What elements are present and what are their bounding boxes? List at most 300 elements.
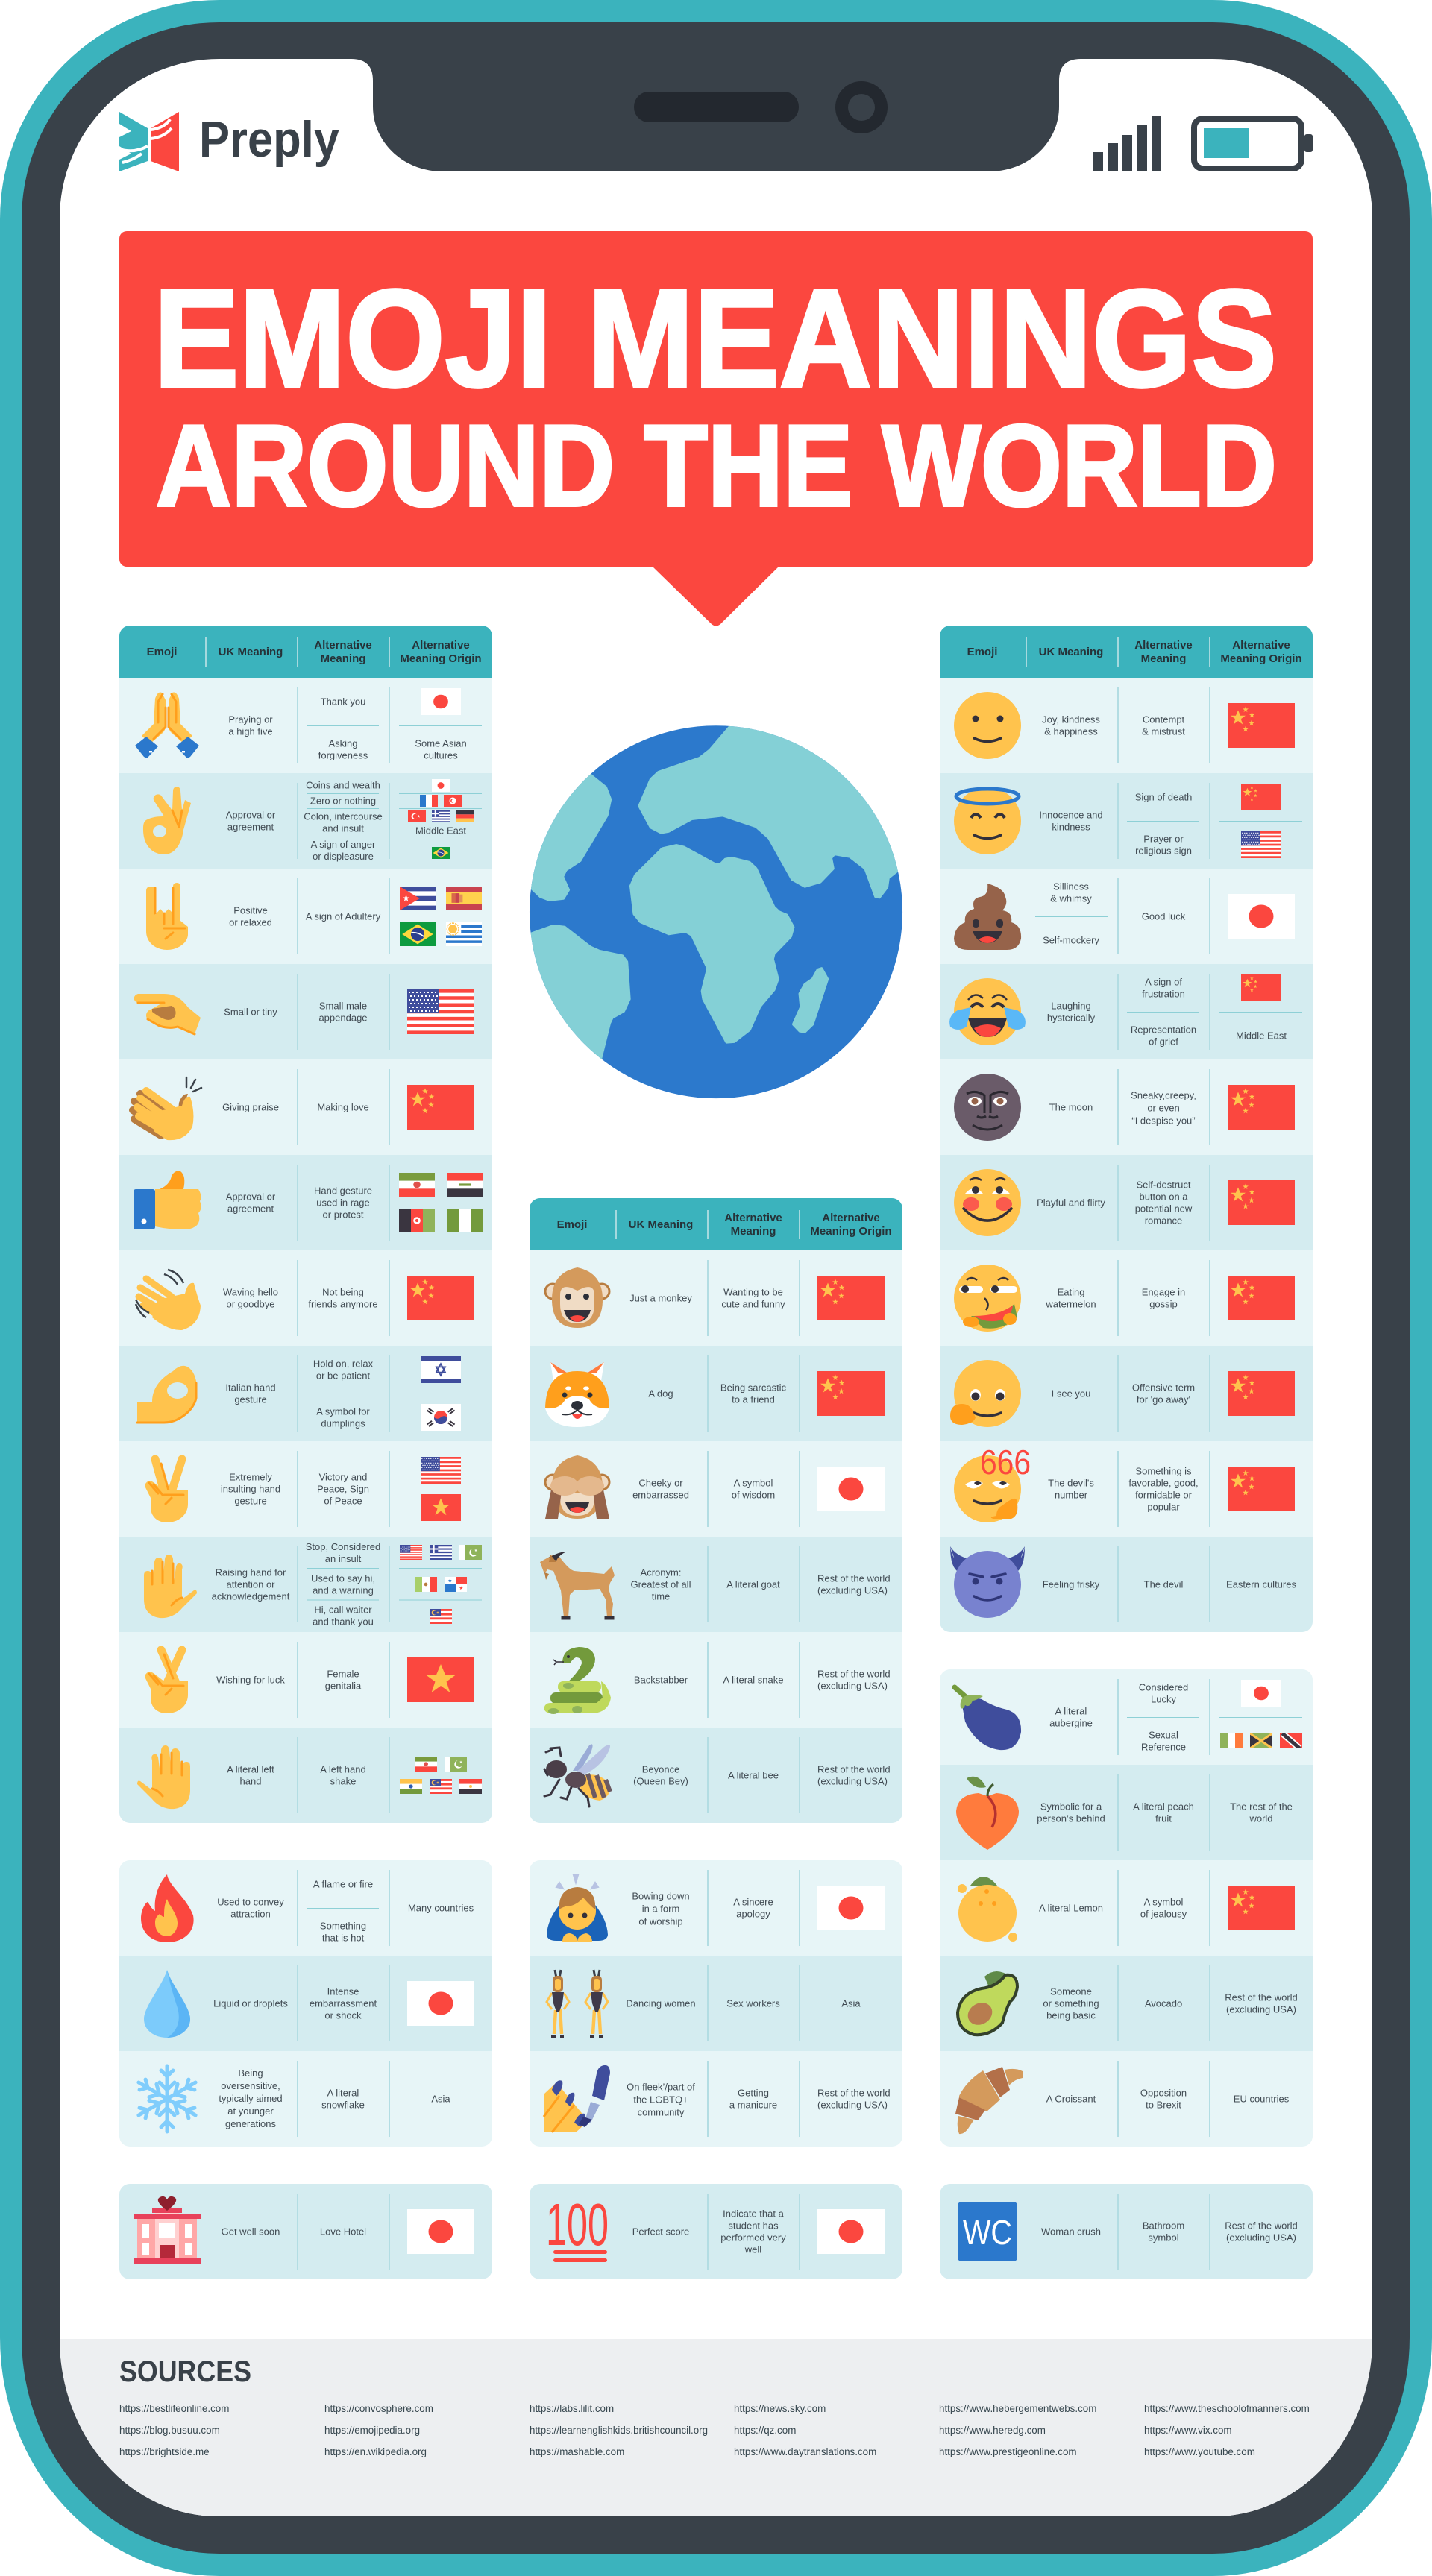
text: UK meaning: the LGBTQ+: [633, 2094, 688, 2106]
text: alternative meanings: that is hot: [322, 1933, 365, 1943]
text: UK meaning: Beyonce: [642, 1764, 679, 1774]
text: UK meaning: oversensitive,: [221, 2080, 280, 2091]
text: alternative meaning: Small male: [319, 1001, 367, 1011]
text: origin: world: [1249, 1813, 1273, 1824]
row: avocado: [940, 1956, 1313, 2051]
text: UK meaning: kindness: [1052, 822, 1090, 832]
text: alternative meaning: A left hand: [320, 1764, 366, 1774]
text: alternative meaning: romance: [1145, 1215, 1182, 1226]
text: alternative meanings: Stop, Considered: [306, 1541, 380, 1552]
origin flag: [817, 1886, 885, 1930]
icon: left raised hand: [137, 1745, 190, 1809]
row: victory hand: [119, 1441, 492, 1537]
icon: fire: [141, 1874, 194, 1942]
source links: https://convosphere.com: [324, 2403, 433, 2414]
text: UK meaning: gesture: [234, 1394, 267, 1405]
origin flag: [817, 1276, 885, 1320]
text: UK meaning: Raising hand for: [216, 1567, 286, 1578]
origin flag: [407, 1085, 474, 1130]
row: bee: [530, 1728, 902, 1823]
origin flag: [407, 1276, 474, 1320]
text: alternative meaning: embarrassment: [310, 1998, 377, 2009]
panel: middle table: [530, 1198, 902, 1823]
source links: https://www.vix.com: [1144, 2425, 1232, 2436]
text: alternative meanings: frustration: [1142, 989, 1185, 999]
icon: signal bars: [1093, 116, 1161, 171]
text: UK meaning: Backstabber: [634, 1675, 688, 1685]
text: UK meaning: Symbolic for a: [1040, 1801, 1102, 1812]
text: UK meaning: Cheeky or: [638, 1478, 683, 1488]
row: watermelon: [940, 1250, 1313, 1346]
source links: https://labs.lilit.com: [530, 2403, 614, 2414]
text: UK meaning: watermelon: [1045, 1299, 1096, 1309]
text: alternative meaning: A literal: [327, 2088, 359, 2098]
text: origin: (excluding USA): [1226, 2232, 1296, 2243]
text: alternative meaning: potential new: [1135, 1203, 1193, 1214]
panel: 100 table: [530, 2184, 902, 2279]
text: alternative meaning: shake: [330, 1776, 356, 1786]
text: alternative meaning: Something is: [1135, 1466, 1192, 1476]
origin flag: [1228, 1467, 1295, 1511]
text: UK meaning: A Croissant: [1046, 2094, 1096, 2104]
origin flag: [817, 1371, 885, 1416]
text: UK meaning: Feeling frisky: [1043, 1579, 1100, 1590]
origin flags: [400, 1757, 482, 1794]
text: origin: (excluding USA): [1226, 2004, 1296, 2015]
text: alternative meaning: fruit: [1155, 1813, 1172, 1824]
text: UK meaning: Acronym:: [641, 1567, 681, 1578]
text: alternative meanings: Hi, call waiter: [314, 1605, 372, 1615]
text: alternative meanings: [304, 780, 383, 862]
header row: Meaning Origin: [810, 1225, 892, 1238]
text: alternative meaning: A literal snake: [723, 1675, 783, 1685]
text: UK meaning: I see you: [1052, 1388, 1090, 1399]
text: alternative meaning: “I despise you”: [1131, 1115, 1196, 1126]
text: alternative meaning: or shock: [324, 2010, 362, 2021]
icon: hundred points: [546, 2191, 609, 2262]
text: UK meaning: On fleek’/part of: [626, 2082, 695, 2092]
origin flag: [1228, 1180, 1295, 1225]
text: origin: The rest of the: [1230, 1801, 1293, 1812]
icon: victory hand: [145, 1459, 188, 1522]
text: UK meaning: Get well soon: [222, 2226, 280, 2237]
text: UK meaning: Dancing women: [626, 1998, 696, 2009]
icon: monkey face: [545, 1267, 609, 1328]
source links: https://qz.com: [734, 2425, 796, 2436]
speaker: [634, 92, 799, 122]
text: UK meaning: or goodbye: [226, 1299, 275, 1309]
text: alternative meaning: Love Hotel: [320, 2226, 366, 2237]
text: alternative meaning: A sincere: [733, 1897, 773, 1907]
text: alternative meaning: to Brexit: [1146, 2100, 1181, 2110]
row: dancers: [530, 1956, 902, 2051]
icon: face with halo: [954, 787, 1021, 854]
logo: Preply: Preply: [199, 111, 339, 168]
text: UK meaning: or relaxed: [229, 917, 272, 928]
origin flags: [399, 779, 482, 859]
text: origin: Rest of the world: [817, 1764, 891, 1774]
text: alternative meaning: for 'go away': [1137, 1394, 1190, 1405]
panel: WC table: [940, 2184, 1313, 2279]
text: UK meaning: Just a monkey: [629, 1293, 692, 1303]
text: alternative meaning: student has: [728, 2220, 779, 2231]
text: origin: Many countries: [408, 1903, 474, 1913]
origin: Middle East: [1236, 1030, 1287, 1041]
source links: https://www.hebergementwebs.com: [939, 2403, 1096, 2414]
text: alternative meaning: cute and funny: [721, 1299, 785, 1309]
row: horns hand: [119, 869, 492, 964]
origin flags: [400, 887, 482, 946]
text: UK meaning: person’s behind: [1037, 1813, 1105, 1824]
row: tears of joy: [940, 964, 1313, 1059]
text: alternative meanings: or be patient: [316, 1370, 371, 1381]
text: origin: Rest of the world: [1225, 1992, 1298, 2003]
icon: waving hand: [136, 1270, 201, 1330]
icon: snowflake: [135, 2066, 199, 2132]
text: UK meanings: & whimsy: [1050, 893, 1092, 904]
text: UK meaning: Laughing: [1051, 1001, 1091, 1011]
origin flags: [399, 1356, 482, 1431]
row: waving hand: [119, 1250, 492, 1346]
text: alternative meaning: button on a: [1139, 1191, 1188, 1202]
text: alternative meanings: A symbol for: [316, 1406, 370, 1417]
text: UK meanings: Self-mockery: [1043, 935, 1099, 945]
text: alternative meanings: A flame or fire: [313, 1879, 373, 1889]
text: alternative meanings: A sign of: [1145, 977, 1182, 987]
text: alternative meaning: Indicate that a: [723, 2208, 784, 2219]
icon: raised hand: [144, 1555, 197, 1618]
source links: https://learnenglishkids.britishcouncil.org: [530, 2425, 708, 2436]
row: dog: [530, 1346, 902, 1441]
text: UK meaning: Italian hand: [225, 1382, 276, 1393]
text: UK meaning: acknowledgement: [212, 1591, 290, 1602]
text: alternative meanings: dumplings: [321, 1418, 365, 1429]
icon: new moon face: [954, 1074, 1021, 1141]
text: UK meaning: (Queen Bey): [633, 1776, 688, 1786]
source links: https://www.youtube.com: [1144, 2446, 1255, 2457]
icon: face peeking with hand: [950, 1360, 1021, 1427]
origin flag: [407, 1981, 474, 2026]
panel: right table: [940, 626, 1313, 1632]
text: alternative meanings: [307, 1358, 379, 1429]
origin flags: [399, 1173, 483, 1232]
text: UK meaning: number: [1055, 1490, 1088, 1500]
header row: Meaning Origin: [400, 652, 482, 665]
text: alternative meaning: Contempt: [1143, 714, 1184, 725]
row: Italian hand: [119, 1346, 492, 1441]
text: UK meaning: Approval or: [226, 810, 275, 820]
text: alternative meanings: religious sign: [1135, 845, 1192, 856]
panel: food table: [940, 1669, 1313, 2147]
text: UK meaning: generations: [225, 2118, 276, 2129]
row: praying hands: [119, 678, 492, 773]
source links: https://blog.busuu.com: [119, 2425, 220, 2436]
origin flags: [399, 1545, 482, 1624]
text: alternative meaning: Self-destruct: [1137, 1180, 1190, 1190]
text: origin: (excluding USA): [817, 2100, 888, 2110]
icon: battery: [1194, 119, 1313, 169]
icon: aubergine: [955, 1687, 1021, 1750]
text: UK meaning: attraction: [230, 1909, 271, 1919]
text: UK meaning: in a form: [642, 1903, 679, 1915]
text: UK meaning: The devil's: [1048, 1478, 1094, 1488]
panel: left table: [119, 626, 492, 1823]
icon: WC sign: WC: [963, 2213, 1012, 2252]
text: alternative meanings: Thank you: [321, 696, 365, 707]
text: alternative meaning: snowflake: [321, 2100, 365, 2110]
text: alternative meanings: [306, 1541, 380, 1627]
text: alternative meaning: A literal peach: [1133, 1801, 1194, 1812]
text: alternative meanings: [307, 1879, 379, 1943]
icon: bowing person: [547, 1875, 608, 1942]
origin flag: [1228, 894, 1295, 939]
header row: Alternative: [1134, 639, 1193, 652]
text: alternative meaning: Opposition: [1140, 2088, 1187, 2098]
header row: Meaning: [731, 1225, 776, 1238]
origin flag: [1228, 1276, 1295, 1320]
text: UK meaning: community: [638, 2107, 685, 2117]
origin: [1219, 974, 1302, 1041]
text: origin: Rest of the world: [1225, 2220, 1298, 2231]
text: alternative meanings: Coins and wealth: [306, 780, 380, 790]
icon: face with tears of joy: [949, 978, 1026, 1045]
text: alternative meaning: genitalia: [325, 1681, 362, 1691]
origin flag: [407, 2209, 474, 2254]
row: smile: [940, 678, 1313, 773]
text: alternative meaning: Good luck: [1142, 911, 1186, 922]
icon: clapping hands: [133, 1077, 201, 1140]
icon: avocado: [958, 1971, 1017, 2035]
icon: peach: [956, 1777, 1019, 1850]
source links: https://news.sky.com: [734, 2403, 826, 2414]
source links: [119, 2403, 1310, 2457]
text: alternative meaning: Avocado: [1145, 1998, 1182, 2009]
text: alternative meaning: Not being: [322, 1287, 364, 1297]
camera: [835, 81, 888, 133]
icon: thumbs up: [134, 1171, 201, 1229]
text: UK meaning: Bowing down: [632, 1891, 690, 1901]
text: alternative meanings: A sign of anger: [311, 839, 375, 850]
origin flags: [1219, 1680, 1302, 1748]
text: alternative meaning: Female: [327, 1669, 359, 1679]
text: alternative meaning: Offensive term: [1132, 1382, 1195, 1393]
icon: dancing women: [547, 1970, 608, 2036]
header row: Alternative: [724, 1212, 782, 1224]
text: UK meaning: or something: [1043, 1998, 1099, 2009]
row: snake: [530, 1632, 902, 1728]
text: alternative meaning: Getting: [738, 2088, 769, 2098]
header row: UK Meaning: [219, 646, 283, 658]
source links: https://mashable.com: [530, 2446, 624, 2457]
text: alternative meaning: Sneaky,creepy,: [1131, 1090, 1196, 1100]
origin flag: [407, 1657, 474, 1702]
icon: globe: [530, 725, 902, 1099]
icon: Italian hand gesture: [137, 1366, 197, 1423]
text: alternative meanings: Lucky: [1151, 1694, 1176, 1704]
header row: [940, 626, 1313, 678]
icon: face with 666: [954, 1443, 1031, 1522]
origin flag: [1228, 1085, 1295, 1130]
text: UK meaning: being basic: [1046, 2010, 1096, 2021]
text: alternative meaning: A symbol: [734, 1478, 773, 1488]
origin flags: [421, 1457, 461, 1521]
origin flag: [1228, 703, 1295, 748]
header row: Meaning Origin: [1220, 652, 1302, 665]
icon: praying hands: [135, 692, 199, 758]
origin flag: [1228, 1371, 1295, 1416]
text: alternative meaning: to a friend: [732, 1394, 775, 1405]
text: UK meanings: Silliness: [1053, 881, 1089, 892]
text: alternative meanings: [1127, 792, 1199, 856]
row: left hand: [119, 1728, 492, 1823]
header row: Emoji: [557, 1218, 587, 1231]
text: alternative meaning: of wisdom: [732, 1490, 775, 1500]
icon: smiling devil: [950, 1546, 1025, 1618]
text: alternative meaning: gossip: [1149, 1299, 1178, 1309]
text: alternative meaning: or even: [1147, 1102, 1180, 1114]
text: UK meaning: embarrassed: [632, 1490, 689, 1500]
row: goat: [530, 1537, 902, 1632]
row: clapping hands: [119, 1059, 492, 1155]
text: alternative meanings: Zero or nothing: [310, 795, 376, 807]
text: UK meaning: agreement: [227, 822, 274, 832]
text: alternative meanings: forgiveness: [318, 750, 368, 760]
text: UK meaning: A literal Lemon: [1039, 1903, 1103, 1913]
text: UK meaning: Approval or: [226, 1191, 275, 1202]
row: snowflake: [119, 2051, 492, 2147]
icon: WC sign: [958, 2202, 1017, 2261]
text: alternative meaning: Making love: [317, 1102, 369, 1112]
text: alternative meanings: of grief: [1149, 1036, 1178, 1047]
origin flag: [817, 1467, 885, 1511]
icon: goat: [540, 1552, 615, 1619]
row: halo: [940, 773, 1313, 869]
text: UK meaning: A literal left: [227, 1764, 274, 1774]
text: alternative meaning: A literal goat: [726, 1579, 780, 1590]
text: alternative meaning: Bathroom: [1143, 2220, 1184, 2231]
text: UK meaning: at younger: [227, 2106, 274, 2117]
text: alternative meaning: performed very: [720, 2232, 786, 2243]
text: UK meaning: hysterically: [1047, 1013, 1096, 1023]
row: I see you: [940, 1346, 1313, 1441]
row: see-no-evil monkey: [530, 1441, 902, 1537]
text: UK meaning: typically aimed: [219, 2093, 283, 2104]
icon: croissant: [955, 2067, 1023, 2134]
text: alternative meaning: used in rage: [316, 1197, 370, 1208]
text: alternative meaning: Hand gesture: [314, 1185, 372, 1196]
text: UK meaning: attention or: [226, 1579, 275, 1590]
text: origin: (excluding USA): [817, 1585, 888, 1596]
heading: sources: SOURCES: [119, 2355, 251, 2388]
source links: https://www.prestigeonline.com: [939, 2446, 1077, 2457]
text: alternative meaning: symbol: [1148, 2232, 1179, 2243]
text: UK meanings: [1035, 881, 1108, 945]
row: crossed fingers: [119, 1632, 492, 1728]
panel: fire, water, snow table: [119, 1860, 492, 2147]
icon: face with 666: 666: [980, 1443, 1031, 1481]
text: alternative meaning: a manicure: [729, 2100, 777, 2110]
icon: bee: [544, 1744, 610, 1807]
text: origin: (excluding USA): [817, 1776, 888, 1786]
row: OK hand: [119, 773, 492, 869]
row: water drop: [119, 1956, 492, 2051]
origin flag: [1228, 1886, 1295, 1930]
icon: horns hand: [146, 883, 188, 950]
text: alternative meanings: Prayer or: [1143, 834, 1184, 844]
text: alternative meanings: Colon, intercourse: [304, 811, 383, 822]
icon: face eating watermelon: [954, 1265, 1021, 1332]
text: UK meaning: Liquid or droplets: [213, 1998, 288, 2009]
text: origin: Rest of the world: [817, 2088, 891, 2098]
text: alternative meaning: Peace, Sign: [317, 1484, 369, 1494]
text: UK meaning: Eating: [1058, 1287, 1084, 1297]
icon: crossed fingers: [145, 1650, 188, 1713]
text: alternative meaning: Wanting to be: [723, 1287, 783, 1297]
source links: https://brightside.me: [119, 2446, 210, 2457]
text: UK meaning: A dog: [648, 1388, 673, 1399]
text: UK meaning: a high five: [228, 726, 273, 737]
text: alternative meaning: popular: [1147, 1502, 1180, 1512]
text: UK meaning: Innocence and: [1039, 810, 1103, 820]
row: 666: [940, 1441, 1313, 1537]
panel: bow, dancers, nails table: [530, 1860, 902, 2147]
text: UK meaning: agreement: [227, 1203, 274, 1214]
header row: Alternative: [822, 1212, 880, 1224]
origin flag: [817, 2209, 885, 2254]
text: alternative meaning: appendage: [318, 1013, 368, 1023]
text: UK meaning: Perfect score: [632, 2226, 689, 2237]
origin flag: [407, 989, 474, 1034]
icon: OK hand: [143, 787, 191, 854]
header row: Alternative: [1232, 639, 1290, 652]
row: peach: [940, 1765, 1313, 1860]
title banner: EMOJI MEANINGS: [154, 262, 1277, 416]
text: UK meaning: Woman crush: [1041, 2226, 1101, 2237]
text: alternative meaning: well: [744, 2244, 761, 2255]
header row: Alternative: [314, 639, 372, 652]
header row: Emoji: [967, 646, 997, 658]
text: alternative meaning: Intense: [327, 1986, 359, 1997]
origin: Japan and Asia: Some Asian: [415, 738, 467, 749]
source links: https://emojipedia.org: [324, 2425, 420, 2436]
source links: https://bestlifeonline.com: [119, 2403, 229, 2414]
row: nail polish: [530, 2051, 902, 2147]
text: alternative meaning: Victory and: [319, 1472, 367, 1482]
text: alternative meanings: Hold on, relax: [313, 1358, 373, 1369]
title banner: [119, 231, 1313, 626]
text: UK meaning: Waving hello: [223, 1287, 278, 1297]
text: UK meaning: Greatest of all: [631, 1579, 691, 1590]
text: alternative meanings: an insult: [325, 1553, 362, 1564]
text: origin: (excluding USA): [817, 1681, 888, 1691]
text: UK meaning: Giving praise: [222, 1102, 279, 1112]
text: UK meaning: Being: [238, 2068, 263, 2079]
text: UK meaning: Positive: [233, 905, 268, 916]
text: origin: EU countries: [1234, 2094, 1290, 2104]
text: origin: Rest of the world: [817, 1669, 891, 1679]
origin flags: [1219, 784, 1302, 858]
origin flags: Middle East: [415, 825, 466, 837]
text: UK meaning: aubergine: [1049, 1718, 1093, 1728]
text: alternative meanings: or displeasure: [313, 851, 374, 862]
row: pinching hand: [119, 964, 492, 1059]
text: alternative meanings: Representation: [1131, 1024, 1196, 1035]
icon: see-no-evil monkey: [545, 1455, 609, 1519]
text: alternative meaning: The devil: [1144, 1579, 1183, 1590]
text: origin: Asia: [841, 1998, 861, 2009]
text: alternative meaning: Sex workers: [726, 1998, 780, 2009]
icon: playful blushing face: [954, 1169, 1021, 1236]
